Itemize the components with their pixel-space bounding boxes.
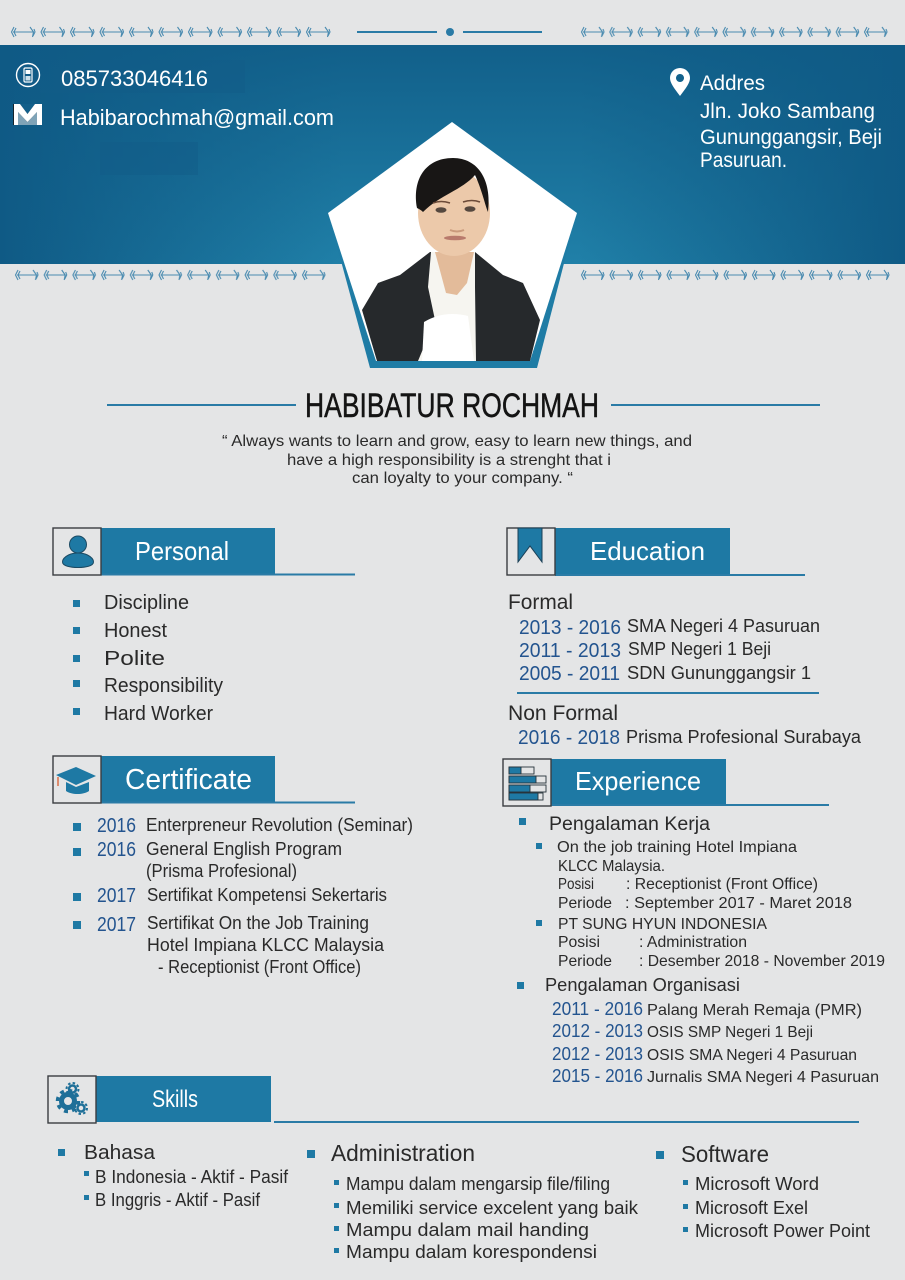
organisation experience: Palang Merah Remaja (PMR) bbox=[647, 1002, 862, 1019]
organisation experience: Pengalaman Organisasi bbox=[545, 975, 740, 995]
icon: bars bbox=[509, 767, 546, 800]
header: certificate bbox=[53, 756, 355, 803]
work experience: KLCC Malaysia. bbox=[558, 858, 665, 875]
formal education: 2013 - 2016 bbox=[519, 617, 621, 639]
contact: email: Habibarochmah@gmail.com bbox=[60, 105, 334, 130]
organisation experience: 2012 - 2013 bbox=[552, 1044, 643, 1064]
work experience: : September 2017 - Maret 2018 bbox=[625, 895, 852, 912]
contact: address: Pasuruan. bbox=[700, 149, 787, 172]
icon: graduation cap bbox=[56, 767, 96, 794]
work experience: Posisi bbox=[558, 876, 594, 893]
list: certificates: 2017 bbox=[97, 914, 136, 936]
header: certificate: Certificate bbox=[125, 764, 252, 796]
skills: administration: Mampu dalam mengarsip file/filing bbox=[346, 1174, 610, 1194]
list: certificates: - Receptionist (Front Office) bbox=[158, 957, 361, 977]
skills: bahasa: B Inggris - Aktif - Pasif bbox=[95, 1190, 261, 1210]
work experience: PT SUNG HYUN INDONESIA bbox=[558, 916, 767, 933]
formal education: SDN Gununggangsir 1 bbox=[627, 663, 811, 683]
skills: administration bbox=[307, 1140, 639, 1262]
name heading: HABIBATUR ROCHMAH bbox=[305, 387, 599, 425]
quote: have a high responsibility is a strenght that i bbox=[287, 452, 611, 469]
list: personal traits bbox=[73, 592, 223, 725]
organisation experience: 2012 - 2013 bbox=[552, 1021, 643, 1041]
work experience: : Desember 2018 - November 2019 bbox=[639, 953, 885, 970]
formal education: Formal bbox=[508, 591, 573, 614]
list: certificates: 2016 bbox=[97, 839, 136, 861]
non formal education: 2016 - 2018 bbox=[518, 727, 620, 749]
panel: certificate bbox=[53, 756, 413, 977]
icon: gears bbox=[58, 1083, 87, 1114]
work experience bbox=[519, 814, 885, 970]
non formal education: Non Formal bbox=[508, 702, 618, 725]
list: personal traits: Discipline bbox=[104, 592, 189, 614]
work experience: Periode bbox=[558, 953, 612, 970]
non formal education bbox=[508, 702, 862, 749]
list: personal traits: Polite bbox=[104, 648, 165, 670]
organisation experience: Jurnalis SMA Negeri 4 Pasuruan bbox=[647, 1069, 879, 1086]
portrait pentagon bbox=[328, 122, 577, 368]
list: personal traits: Honest bbox=[104, 620, 167, 642]
list: certificates: General English Program bbox=[146, 839, 342, 859]
formal education bbox=[508, 591, 820, 685]
contact: address: Addres bbox=[700, 72, 765, 95]
formal education: SMA Negeri 4 Pasuruan bbox=[627, 616, 820, 636]
header: personal: Personal bbox=[135, 536, 229, 566]
organisation experience: OSIS SMA Negeri 4 Pasuruan bbox=[647, 1047, 857, 1064]
list: certificates: Hotel Impiana KLCC Malaysia bbox=[147, 935, 385, 955]
organisation experience bbox=[517, 975, 879, 1086]
skills: software bbox=[656, 1141, 870, 1241]
top ornament right bbox=[579, 24, 890, 40]
header: skills bbox=[48, 1076, 859, 1123]
list: certificates: Enterpreneur Revolution (Seminar) bbox=[146, 815, 413, 835]
organisation experience: 2015 - 2016 bbox=[552, 1066, 643, 1086]
skills: bahasa bbox=[58, 1142, 289, 1210]
skills: software: Microsoft Word bbox=[695, 1174, 819, 1194]
skills: administration: Mampu dalam mail handing bbox=[346, 1220, 589, 1240]
panel: experience bbox=[503, 759, 885, 1086]
work experience: Periode bbox=[558, 895, 612, 912]
pentagon frame bbox=[328, 213, 577, 368]
contact: address bbox=[670, 68, 882, 172]
panel: skills bbox=[48, 1076, 870, 1262]
list: certificates: 2017 bbox=[97, 885, 136, 907]
formal education: 2005 - 2011 bbox=[519, 663, 620, 685]
work experience: Posisi bbox=[558, 934, 600, 951]
header: personal bbox=[53, 528, 355, 575]
header: skills: Skills bbox=[152, 1086, 198, 1113]
contact: phone bbox=[16, 64, 208, 91]
skills: bahasa: B Indonesia - Aktif - Pasif bbox=[95, 1167, 289, 1187]
bottom ornament left bbox=[13, 267, 329, 283]
bottom ornament right bbox=[579, 267, 892, 283]
skills: software: Microsoft Power Point bbox=[695, 1221, 870, 1241]
header band bbox=[0, 45, 905, 264]
header: education bbox=[507, 528, 805, 575]
panel: education bbox=[507, 528, 862, 749]
panel: personal bbox=[53, 528, 355, 725]
organisation experience: OSIS SMP Negeri 1 Beji bbox=[647, 1024, 813, 1041]
icon: location pin bbox=[670, 68, 690, 96]
skills: administration: Mampu dalam korespondensi bbox=[346, 1242, 597, 1262]
header: experience: Experience bbox=[575, 766, 701, 796]
work experience: On the job training Hotel Impiana bbox=[557, 839, 797, 856]
work experience: : Receptionist (Front Office) bbox=[626, 876, 818, 893]
skills: administration: Administration bbox=[331, 1140, 475, 1166]
list: certificates bbox=[73, 815, 413, 977]
list: certificates: 2016 bbox=[97, 815, 136, 837]
non formal education: Prisma Profesional Surabaya bbox=[626, 727, 862, 747]
list: personal traits: Hard Worker bbox=[104, 703, 213, 725]
organisation experience: 2011 - 2016 bbox=[552, 999, 643, 1019]
quote: can loyalty to your company. “ bbox=[352, 470, 573, 487]
skills: software: Microsoft Exel bbox=[695, 1198, 808, 1218]
icon: bookmark bbox=[518, 528, 542, 562]
contact: address: Jln. Joko Sambang bbox=[700, 100, 875, 123]
formal education: SMP Negeri 1 Beji bbox=[628, 639, 771, 659]
contact: phone: 085733046416 bbox=[61, 66, 208, 91]
header: experience bbox=[503, 759, 829, 806]
list: personal traits: Responsibility bbox=[104, 675, 223, 697]
pentagon white bbox=[328, 122, 577, 361]
photo bbox=[362, 158, 540, 361]
top ornament left bbox=[9, 24, 334, 40]
list: certificates: (Prisma Profesional) bbox=[146, 861, 297, 881]
skills: software: Software bbox=[681, 1141, 769, 1167]
list: certificates: Sertifikat On the Job Training bbox=[147, 913, 369, 933]
quote: “ Always wants to learn and grow, easy to learn new things, and bbox=[222, 433, 692, 450]
icon: mail bbox=[13, 104, 42, 125]
work experience: Pengalaman Kerja bbox=[549, 814, 710, 835]
skills: administration: Memiliki service excelent yang baik bbox=[346, 1198, 639, 1218]
icon: person bbox=[62, 536, 94, 568]
header: education: Education bbox=[590, 536, 705, 566]
work experience: : Administration bbox=[639, 934, 747, 951]
list: certificates: Sertifikat Kompetensi Sekertaris bbox=[147, 885, 387, 905]
contact: address: Gununggangsir, Beji bbox=[700, 126, 882, 149]
formal education: 2011 - 2013 bbox=[519, 640, 621, 662]
skills: bahasa: Bahasa bbox=[84, 1142, 156, 1164]
top center divider bbox=[357, 28, 542, 36]
quote bbox=[222, 433, 692, 487]
icon: phone bbox=[16, 64, 40, 86]
